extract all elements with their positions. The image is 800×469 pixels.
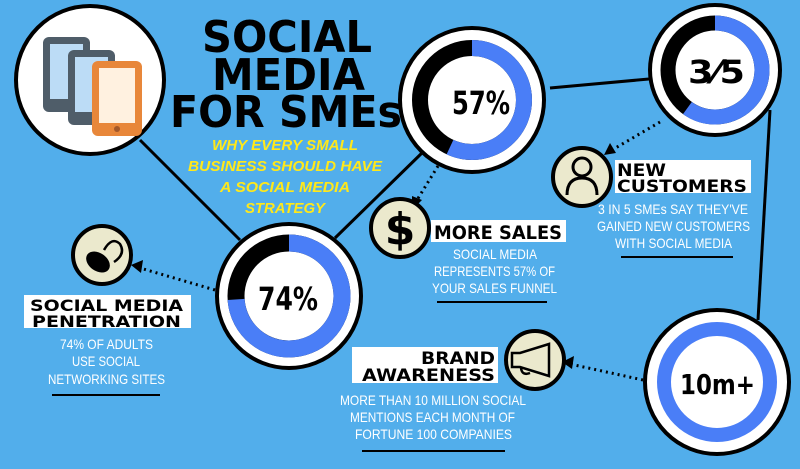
label: social media penetration: USE SOCIAL: [72, 353, 140, 369]
icon: dollar: $: [385, 204, 415, 255]
label: new customers: GAINED NEW CUSTOMERS: [597, 218, 750, 234]
label: brand awareness: MORE THAN 10 MILLION SOCIAL: [340, 392, 526, 408]
donut 74%: [217, 224, 361, 368]
label: social media penetration: PENETRATION: [32, 312, 181, 331]
label: brand awareness: MENTIONS EACH MONTH OF: [350, 409, 515, 425]
connector lines: [140, 78, 770, 320]
label: social media penetration: [24, 295, 191, 395]
title: MEDIA: [212, 50, 365, 101]
subtitle: WHY EVERY SMALL: [212, 137, 358, 154]
title: FOR SMEs: [170, 87, 402, 138]
label: more sales: MORE SALES: [434, 222, 562, 244]
label: new customers: NEW: [617, 161, 666, 181]
label: more sales: [431, 220, 566, 302]
label: new customers: CUSTOMERS: [617, 177, 747, 197]
label: social media penetration: SOCIAL MEDIA: [30, 296, 184, 315]
label: brand awareness: BRAND: [421, 349, 495, 369]
subtitle: A SOCIAL MEDIA: [219, 179, 350, 196]
donut 57%: 57%: [452, 84, 510, 122]
label: social media penetration: NETWORKING SITES: [48, 371, 165, 387]
title: [170, 12, 402, 138]
icon: person: [553, 148, 611, 206]
subtitle: BUSINESS SHOULD HAVE: [188, 158, 383, 175]
donut 57%: [400, 28, 544, 172]
donut 3/5: 3⁄5: [688, 53, 745, 91]
dotted arrows: [140, 122, 660, 380]
donut 3/5: [650, 5, 780, 135]
donut 74%: 74%: [258, 280, 318, 318]
label: new customers: [597, 160, 751, 257]
label: brand awareness: [340, 347, 526, 451]
label: more sales: SOCIAL MEDIA: [453, 246, 538, 262]
subtitle: STRATEGY: [245, 200, 327, 217]
title: SOCIAL: [202, 12, 372, 63]
icon: mouse: [73, 226, 131, 284]
icon: dollar: [371, 199, 429, 257]
label: social media penetration: 74% OF ADULTS: [60, 336, 153, 352]
label: brand awareness: AWARENESS: [362, 366, 495, 386]
device icon circle: [16, 6, 164, 154]
label: brand awareness: FORTUNE 100 COMPANIES: [355, 426, 512, 442]
label: new customers: 3 IN 5 SMEs SAY THEY'VE: [598, 201, 748, 217]
icon: megaphone: [506, 331, 564, 389]
label: more sales: REPRESENTS 57% OF: [434, 263, 555, 279]
donut 10m+: [645, 310, 789, 454]
label: more sales: YOUR SALES FUNNEL: [432, 280, 557, 296]
donut 10m+: 10m+: [680, 368, 755, 401]
subtitle: [188, 137, 383, 217]
label: new customers: WITH SOCIAL MEDIA: [615, 235, 733, 251]
